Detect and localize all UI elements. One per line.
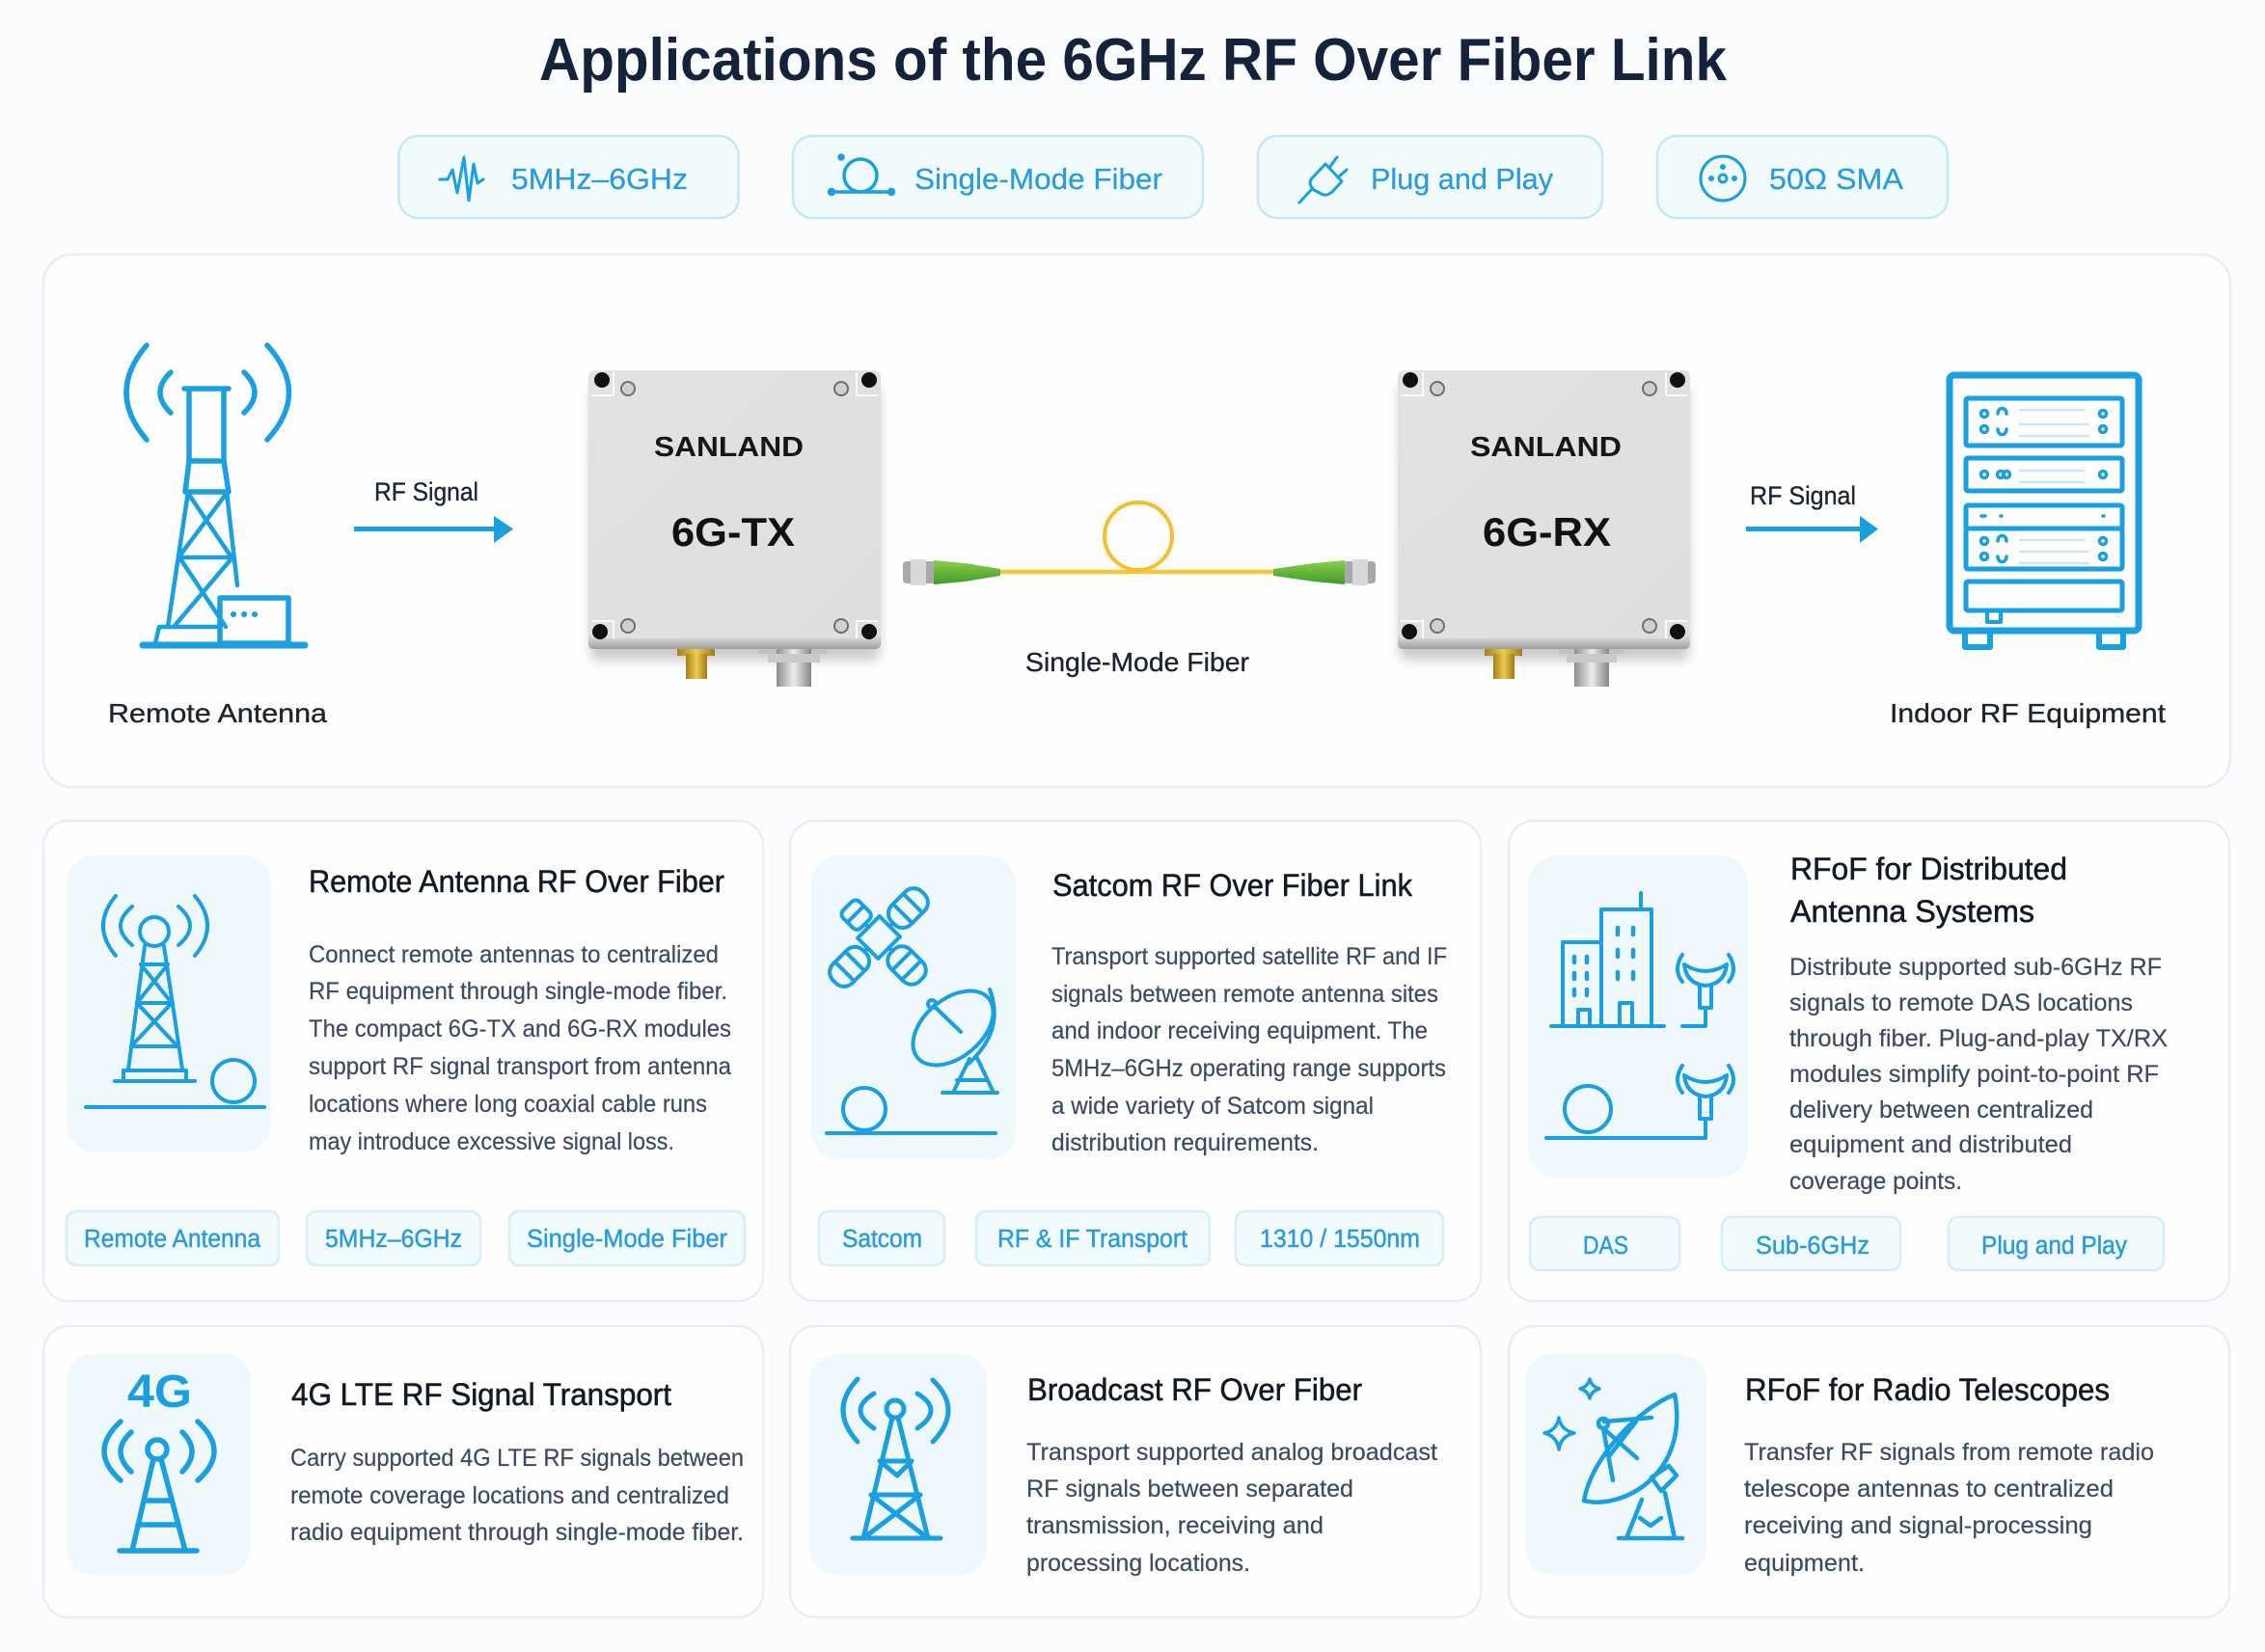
icon: remote antenna tower (126, 345, 305, 645)
icon: radio telescope (1544, 1379, 1682, 1538)
icon: tower with fiber loop (86, 896, 264, 1107)
fiber link with loop (903, 502, 1376, 585)
body text: equipment. (1744, 1550, 1865, 1577)
tag: Single-Mode Fiber (509, 1211, 745, 1265)
body text: Distribute supported sub-6GHz RF (1789, 954, 2162, 981)
body text (309, 941, 731, 1155)
tag: DAS: DAS (1583, 1232, 1628, 1259)
label: Indoor RF Equipment: Indoor RF Equipment (1890, 698, 2166, 728)
body text: telescope antennas to centralized (1744, 1476, 2114, 1503)
body text: and indoor receiving equipment. The (1051, 1017, 1428, 1044)
device: 6G-RX module: SANLAND (1470, 432, 1622, 463)
feature pill: 50 ohm SMA: 50Ω SMA (1769, 162, 1903, 196)
body text (1744, 1439, 2154, 1577)
device: 6G-TX module: 6G-TX (671, 509, 795, 555)
body text: remote coverage locations and centralized (290, 1482, 729, 1509)
arrow: RF signal out: RF Signal (1750, 481, 1856, 510)
device: 6G-RX module: 6G-RX (1483, 509, 1611, 555)
body text: RF signals between separated (1026, 1476, 1353, 1503)
card: Broadcast RF Over Fiber: Broadcast RF Over Fiber (1027, 1372, 1362, 1407)
body text: distribution requirements. (1051, 1129, 1319, 1156)
body text: radio equipment through single-mode fiber. (290, 1519, 744, 1546)
arrow: RF signal in (354, 477, 513, 543)
body text: Carry supported 4G LTE RF signals between (290, 1445, 744, 1472)
body text: modules simplify point-to-point RF (1789, 1061, 2159, 1088)
body text (1051, 943, 1447, 1156)
card: RFoF for Radio Telescopes (1509, 1326, 2229, 1617)
icon: indoor RF equipment rack (1950, 375, 2139, 647)
icon: satellite and dish (804, 862, 1007, 1133)
body text: receiving and signal-processing (1744, 1512, 2092, 1539)
tag: Plug and Play: Plug and Play (1981, 1232, 2127, 1259)
icon: waveform (440, 157, 483, 201)
card: Broadcast RF Over Fiber (790, 1326, 1481, 1617)
icon: broadcast tower (843, 1379, 948, 1538)
card: 4G LTE RF Signal Transport: 4G LTE RF Signal Transport (291, 1377, 671, 1412)
label: Remote Antenna: Remote Antenna (108, 698, 327, 728)
card: Remote Antenna RF Over Fiber: Remote Antenna RF Over Fiber (309, 864, 724, 899)
device: 6G-RX module (1398, 370, 1690, 687)
tag: 5MHz-6GHz: 5MHz–6GHz (325, 1226, 462, 1253)
body text: locations where long coaxial cable runs (309, 1091, 707, 1118)
body text: transmission, receiving and (1026, 1512, 1324, 1539)
body text: Transport supported analog broadcast (1026, 1439, 1437, 1466)
device: 6G-TX module: SANLAND (654, 432, 804, 463)
card: Remote Antenna RF Over Fiber (43, 821, 763, 1301)
icon: buildings, antennas and fiber (1546, 893, 1733, 1138)
body text (290, 1445, 744, 1546)
tag: 1310 / 1550nm (1236, 1211, 1443, 1265)
tag: Sub-6GHz (1722, 1217, 1900, 1270)
card: RFoF for Radio Telescopes: RFoF for Radio Telescopes (1745, 1372, 2110, 1407)
feature pill: 5MHz-6GHz (399, 136, 739, 218)
body text: equipment and distributed (1789, 1131, 2072, 1158)
tag: Single-Mode Fiber: Single-Mode Fiber (527, 1226, 727, 1253)
tag: RF & IF Transport (976, 1211, 1210, 1265)
body text: support RF signal transport from antenna (309, 1053, 731, 1080)
arrow: RF signal out (1746, 481, 1878, 543)
body text (1789, 954, 2168, 1195)
body text: a wide variety of Satcom signal (1051, 1093, 1374, 1120)
body text: Connect remote antennas to centralized (309, 941, 719, 968)
icon: plug (1299, 157, 1347, 203)
heading: Antenna Systems (1790, 894, 2034, 929)
body text: may introduce excessive signal loss. (309, 1128, 674, 1155)
body text: through fiber. Plug-and-play TX/RX (1789, 1025, 2168, 1052)
card: RFoF for Distributed Antenna Systems (1509, 821, 2229, 1301)
arrow: RF signal in: RF Signal (374, 477, 478, 506)
body text: RF equipment through single-mode fiber. (309, 978, 727, 1005)
body text: Transport supported satellite RF and IF (1051, 943, 1447, 970)
tag: Sub-6GHz: Sub-6GHz (1756, 1232, 1869, 1259)
icon: fiber loop (830, 155, 893, 195)
device: 6G-TX module (588, 370, 881, 687)
title: Applications of the 6GHz RF Over Fiber Link (539, 27, 1727, 94)
body text: Transfer RF signals from remote radio (1744, 1439, 2154, 1466)
icon: 4G tower (104, 1367, 214, 1551)
card: Satcom RF Over Fiber Link: Satcom RF Over Fiber Link (1052, 868, 1413, 903)
heading: RFoF for Distributed (1790, 852, 2067, 886)
body text: signals to remote DAS locations (1789, 989, 2133, 1016)
body text: 5MHz–6GHz operating range supports (1051, 1055, 1446, 1082)
tag: Remote Antenna: Remote Antenna (84, 1226, 261, 1253)
feature pill: plug and play: Plug and Play (1371, 162, 1553, 196)
card: Satcom RF Over Fiber Link (790, 821, 1481, 1301)
label: Single-Mode Fiber: Single-Mode Fiber (1025, 647, 1249, 677)
panel: signal chain diagram (43, 255, 2230, 787)
body text: delivery between centralized (1789, 1097, 2093, 1124)
body text: coverage points. (1789, 1168, 1962, 1195)
feature pill: 50 ohm SMA (1657, 136, 1948, 218)
icon: 4G tower: 4G (127, 1367, 192, 1418)
body text: signals between remote antenna sites (1051, 981, 1438, 1008)
body text: The compact 6G-TX and 6G-RX modules (309, 1016, 731, 1043)
icon: SMA connector (1701, 156, 1745, 201)
tag: 1310 / 1550nm: 1310 / 1550nm (1260, 1226, 1420, 1253)
feature pill: single-mode fiber: Single-Mode Fiber (914, 162, 1162, 196)
feature pill: single-mode fiber (793, 136, 1203, 218)
feature pill: 5MHz-6GHz: 5MHz–6GHz (511, 162, 688, 196)
tag: 5MHz-6GHz (307, 1211, 480, 1265)
tag: Satcom: Satcom (842, 1226, 922, 1253)
tag: RF & IF Transport: RF & IF Transport (997, 1226, 1187, 1253)
heading (1790, 852, 2067, 929)
body text: processing locations. (1026, 1550, 1250, 1577)
card: 4G LTE RF Signal Transport (43, 1326, 763, 1617)
feature pill: plug and play (1258, 136, 1602, 218)
tag: Remote Antenna (67, 1211, 279, 1265)
tag: Satcom (819, 1211, 944, 1265)
tag: Plug and Play (1949, 1217, 2164, 1270)
body text (1026, 1439, 1437, 1577)
tag: DAS (1530, 1217, 1679, 1270)
